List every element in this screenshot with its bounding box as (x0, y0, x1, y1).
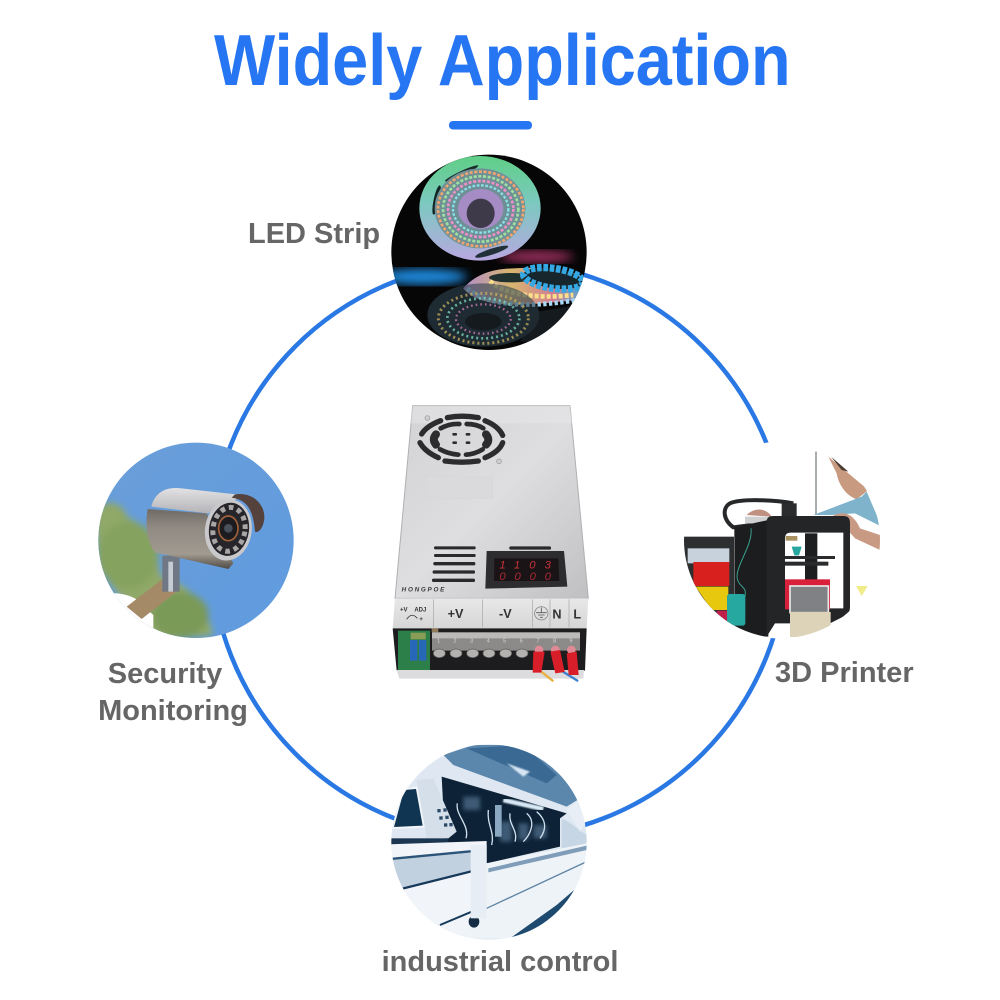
terminal block: 1 (437, 639, 440, 645)
title underline (449, 121, 532, 130)
terminal block: 3 (470, 639, 473, 645)
terminal block: 8 (553, 639, 556, 645)
top plate (395, 406, 588, 598)
bottom lip (397, 670, 584, 679)
photo: industrial machine (391, 744, 587, 940)
terminal block: 5 (503, 639, 506, 645)
label: industrial control: industrial control (382, 946, 618, 978)
title: Widely Application (214, 20, 791, 101)
terminal label band: +V (400, 608, 407, 614)
terminal block (393, 628, 587, 671)
terminal label band: + (419, 617, 423, 623)
digital display: 0000 (499, 571, 552, 583)
photo: LED strip (391, 154, 587, 350)
photo: security camera (98, 442, 294, 638)
photo: 3D printer (684, 442, 880, 638)
digital display (485, 551, 567, 589)
terminal label band: N (552, 607, 561, 621)
brand: HONGPOE (402, 586, 445, 593)
terminal block: 2 (453, 639, 456, 645)
camera mount (127, 556, 180, 619)
terminal block: 9 (569, 639, 572, 645)
red crimp connectors (533, 650, 579, 675)
label: Security Monitoring: Security (108, 658, 222, 690)
vent slots (432, 546, 551, 582)
terminal label band: L (573, 607, 581, 621)
wires (538, 669, 577, 681)
digital display: 1103 (499, 560, 552, 572)
fan grille (420, 416, 503, 462)
faint sticker (426, 477, 493, 498)
label: LED Strip: LED Strip (248, 218, 380, 250)
camera body (146, 488, 264, 569)
terminal block: 6 (520, 639, 523, 645)
label: Security Monitoring: Monitoring (98, 695, 248, 727)
label: 3D Printer: 3D Printer (775, 657, 914, 689)
terminal label band (393, 598, 588, 628)
power supply unit (393, 406, 588, 681)
terminal block: 7 (536, 639, 539, 645)
terminal block: 4 (487, 639, 490, 645)
terminal label band: -V (499, 607, 512, 621)
label: Security Monitoring (98, 658, 248, 727)
terminal label band: +V (448, 607, 464, 621)
terminal label band: ADJ (414, 608, 426, 614)
blue connecting ring (211, 262, 787, 838)
